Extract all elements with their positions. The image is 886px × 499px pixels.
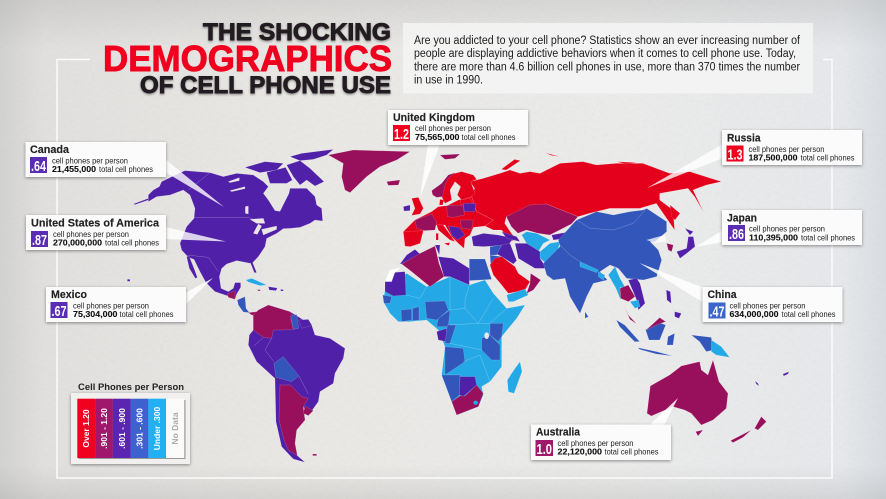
intro text panel: in use in 1990.	[414, 75, 483, 87]
callout: United Kingdom	[388, 110, 528, 198]
Africa and Middle East	[383, 243, 541, 415]
callout: United States of America: total cell phones	[105, 238, 159, 248]
callout: United Kingdom: total cell phones	[462, 133, 516, 142]
callout: Canada	[26, 142, 224, 207]
callout: United States of America: United States of America	[31, 218, 160, 230]
callout: Australia: Australia	[536, 426, 581, 438]
legend swatches: .901 - 1.20	[99, 408, 109, 449]
callout: Australia: cell phones per person	[558, 439, 634, 448]
legend swatches: Under .300	[152, 406, 162, 450]
callout: China: .47	[710, 304, 724, 320]
callout: Mexico: cell phones per person	[73, 302, 149, 310]
title line 1: THE SHOCKING	[203, 19, 391, 46]
intro text panel: Are you addicted to your cell phone? Statistics show an ever increasing number of	[414, 35, 801, 47]
Greenland	[328, 150, 410, 193]
white frame	[57, 60, 832, 478]
callout: Mexico: Mexico	[51, 289, 87, 301]
Southeast Asia and Oceania	[616, 290, 789, 443]
callout: Mexico: .67	[52, 303, 66, 320]
callout: Japan: cell phones per person	[749, 224, 825, 234]
callout: China	[640, 263, 842, 322]
callout: Russia: Russia	[727, 132, 761, 144]
callout: Russia: cell phones per person	[748, 145, 824, 154]
legend swatches: .601 - .900	[117, 408, 127, 449]
legend	[71, 382, 190, 464]
callout: United States of America: 270,000,000	[53, 238, 102, 248]
callout: Russia	[647, 130, 862, 188]
title line 3: OF CELL PHONE USE	[140, 72, 391, 99]
legend swatches: No Data	[170, 412, 180, 445]
North America	[127, 149, 333, 317]
callout: Australia: 1.0	[536, 441, 552, 458]
callout: Mexico	[46, 278, 213, 322]
title line 2: DEMOGRAPHICS	[103, 38, 392, 79]
callout: China: cell phones per person	[730, 302, 806, 310]
callout: Mexico: 75,304,000	[73, 309, 118, 319]
callout: Canada: cell phones per person	[52, 156, 128, 166]
legend title: Cell Phones per Person	[78, 382, 184, 393]
callout: Mexico: total cell phones	[120, 310, 174, 319]
callout: United Kingdom: 75,565,000	[415, 132, 460, 142]
world map	[127, 149, 789, 462]
callout: Australia	[531, 398, 678, 460]
callout: China: 634,000,000	[730, 309, 779, 319]
Russia and Kazakhstan	[470, 153, 721, 241]
title	[103, 19, 392, 99]
callout: Russia: 1.3	[728, 146, 742, 164]
callout: United Kingdom: United Kingdom	[393, 112, 475, 124]
Asia	[543, 205, 695, 324]
callout: China: China	[708, 289, 737, 301]
callout: United Kingdom: 1.2	[394, 126, 409, 143]
callout: Japan: total cell phones	[801, 234, 855, 242]
callout: United States of America: cell phones per person	[53, 230, 129, 239]
callout: China: total cell phones	[782, 310, 836, 319]
legend swatches: Over 1.20	[81, 409, 91, 448]
callout: Japan: .86	[729, 226, 744, 243]
intro text panel: there are more than 4.6 billion cell phones in use, more than 370 times the number	[414, 61, 800, 73]
callout: Australia: total cell phones	[604, 448, 658, 457]
South America	[248, 305, 345, 462]
intro text panel: people are displaying addictive behaviors when it comes to cell phone use. Today,	[414, 48, 796, 60]
callout: Canada: 21,455,000	[52, 164, 96, 174]
callout: Australia: 22,120,000	[558, 447, 602, 457]
legend swatches	[77, 399, 186, 459]
callout: United States of America: .87	[32, 232, 47, 249]
callout: Canada: Canada	[30, 144, 70, 156]
Europe and Central Asia	[387, 154, 577, 268]
intro text panel	[403, 23, 813, 94]
legend panel	[71, 393, 190, 464]
callout: United States of America	[26, 215, 226, 250]
callout: Canada: total cell phones	[99, 165, 153, 174]
callout: United Kingdom: cell phones per person	[415, 124, 491, 133]
callout: Japan: 110,395,000	[749, 232, 798, 242]
legend swatches: .301 - .600	[134, 408, 144, 449]
callout: Russia: 187,500,000	[748, 153, 798, 163]
callout: Japan	[696, 210, 862, 247]
callout: Russia: total cell phones	[800, 154, 854, 163]
callout: Japan: Japan	[727, 212, 757, 224]
callout: Canada: .64	[31, 158, 46, 175]
